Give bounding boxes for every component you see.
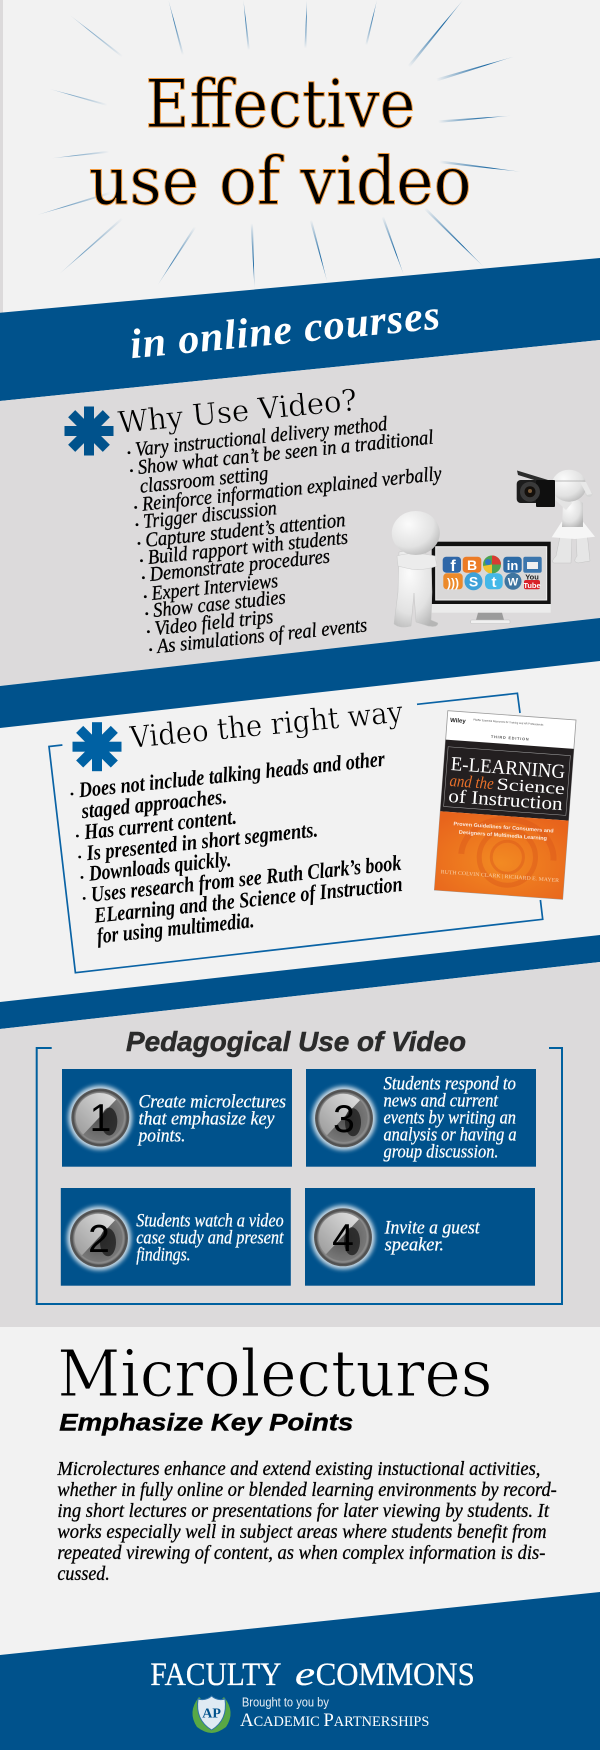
illustration: monitor with social icons xyxy=(432,542,551,624)
camera xyxy=(517,470,555,507)
list: right way: staged approaches. xyxy=(79,783,228,823)
list: right way: ELearning and the Science of Instruction xyxy=(92,871,404,928)
panel: microlectures xyxy=(0,1327,600,1657)
list: right way: for using multimedia. xyxy=(96,907,255,948)
sunburst rays around title xyxy=(37,0,521,288)
panel: video the right way xyxy=(49,693,576,973)
list: right way xyxy=(71,746,404,948)
list: right way: Does not include talking heads and other xyxy=(77,746,386,802)
academic partnerships: ACADEMIC PARTNERSHIPS xyxy=(240,1710,429,1731)
book cover: E-LEARNING xyxy=(450,753,566,783)
card 2: 2 xyxy=(88,1218,110,1261)
logo: AP shield xyxy=(192,1696,231,1733)
list: reasons: Reinforce information explained verbally xyxy=(140,463,443,516)
card 4: 4 xyxy=(332,1217,354,1260)
book cover: THIRD EDITION xyxy=(491,735,530,742)
list: reasons: Expert Interviews xyxy=(150,570,279,605)
illustration: figure beside monitor xyxy=(392,511,440,627)
list: reasons xyxy=(128,413,443,658)
body text: cussed. xyxy=(57,1563,110,1585)
card 1: 1 xyxy=(90,1097,111,1140)
list: reasons: Trigger discussion xyxy=(142,497,278,533)
list: reasons: As simulations of real events xyxy=(154,614,368,658)
list: right way: Is presented in short segments. xyxy=(84,817,319,865)
panel: why use video xyxy=(0,340,600,686)
body text: works especially well in subject areas where students benefit from xyxy=(57,1521,547,1543)
card 3: group discussion. xyxy=(384,1141,498,1162)
title: Effective xyxy=(145,66,415,143)
social icons: Tube xyxy=(523,581,541,590)
icon: asterisk xyxy=(64,406,114,456)
social icons: W xyxy=(508,576,519,588)
book cover: Wiley xyxy=(450,718,467,725)
list: reasons: Video field trips xyxy=(154,606,274,640)
list: reasons: Build rapport with students xyxy=(147,526,349,569)
list: right way: Has current content. xyxy=(82,804,238,844)
frame xyxy=(37,1048,562,1304)
list: right way: Downloads quickly. xyxy=(87,846,232,886)
list: reasons: Capture student’s attention xyxy=(144,509,346,552)
list: reasons: classroom setting xyxy=(139,463,269,498)
card 2 xyxy=(61,1188,291,1286)
social icons xyxy=(443,556,542,591)
book cover: Designers of Multimedia Learning xyxy=(459,830,547,842)
blue banner: in online courses: in online courses xyxy=(128,292,444,368)
body text: repeated virewing of content, as when complex information is dis- xyxy=(57,1542,545,1564)
left edge strip xyxy=(0,0,3,313)
list: right way: Uses research from see Ruth Clark’s book xyxy=(90,850,402,907)
icon: asterisk xyxy=(72,722,122,771)
social icons: S xyxy=(469,574,478,590)
logo: faculty ecommons xyxy=(150,1656,475,1693)
card 3: news and current xyxy=(384,1091,499,1112)
card 2: case study and present xyxy=(136,1228,284,1249)
card 3: analysis or having a xyxy=(384,1125,516,1146)
logo: AP shield: AP xyxy=(202,1706,221,1722)
title: use of video xyxy=(89,143,472,220)
social icons: B xyxy=(467,557,477,573)
body text: whether in fully online or blended learning environments by record- xyxy=(57,1479,557,1501)
list: reasons: Demonstrate procedures xyxy=(148,545,331,586)
book cover: Proven Guidelines for Consumers and xyxy=(453,821,554,835)
card 4 xyxy=(305,1188,535,1286)
subheading: Emphasize Key Points xyxy=(59,1410,353,1437)
card 1: Create microlectures xyxy=(138,1091,286,1112)
book cover: of Instruction xyxy=(448,786,564,815)
panel: pedagogical use of video xyxy=(0,962,600,1327)
blue banner: in online courses xyxy=(0,258,600,401)
heading: video the right way: Video the right way xyxy=(127,695,405,756)
social icons: ))) xyxy=(447,576,459,590)
logo: faculty ecommons: e xyxy=(295,1656,315,1693)
blue divider band 3 xyxy=(0,935,600,1029)
heading: Pedagogical Use of Video xyxy=(126,1026,466,1057)
body text xyxy=(56,1458,557,1585)
list: reasons: Vary instructional delivery method xyxy=(134,413,389,461)
social icons: in xyxy=(507,558,518,573)
book cover: RUTH COLVIN CLARK | RICHARD E. MAYER xyxy=(441,869,560,884)
logo: faculty ecommons: COMMONS xyxy=(316,1657,475,1693)
heading: why use video: Why Use Video? xyxy=(116,383,359,441)
book cover: Science xyxy=(496,774,566,798)
book cover: and the xyxy=(449,771,495,793)
title xyxy=(89,66,472,220)
illustration: figure with camera xyxy=(517,470,595,563)
social icons: You xyxy=(525,572,539,582)
card 2: findings. xyxy=(136,1245,191,1266)
credit text: Brought to you by xyxy=(242,1696,330,1710)
list: reasons: Show what can’t be seen in a traditional xyxy=(137,427,435,479)
body text: Microlectures enhance and extend existing instuctional activities, xyxy=(56,1458,540,1480)
list: reasons: Show case studies xyxy=(152,586,287,622)
body text: ing short lectures or presentations for later viewing by students. It xyxy=(57,1500,549,1522)
logo: faculty ecommons: FACULTY xyxy=(150,1657,281,1693)
card 1: that emphasize key xyxy=(138,1108,275,1129)
card 4: Invite a guest xyxy=(384,1217,480,1238)
social icons: f xyxy=(450,558,456,575)
card 3: 3 xyxy=(333,1098,355,1141)
card 1 xyxy=(62,1069,292,1167)
card 4: speaker. xyxy=(385,1234,444,1255)
heading: microlectures: Microlectures xyxy=(57,1337,492,1412)
frame xyxy=(49,693,543,973)
card 3 xyxy=(306,1069,536,1167)
book cover xyxy=(434,711,576,899)
social icons: t xyxy=(492,574,496,591)
card 1: points. xyxy=(137,1125,186,1146)
blue divider band 2 xyxy=(0,618,600,728)
card 2: Students watch a video xyxy=(136,1211,284,1232)
book cover: Pfeiffer Essential Resources for Training and HR Professionals xyxy=(473,718,544,727)
footer band xyxy=(0,1592,600,1750)
card 3: Students respond to xyxy=(384,1073,516,1094)
card 3: events by writing an xyxy=(384,1108,516,1129)
